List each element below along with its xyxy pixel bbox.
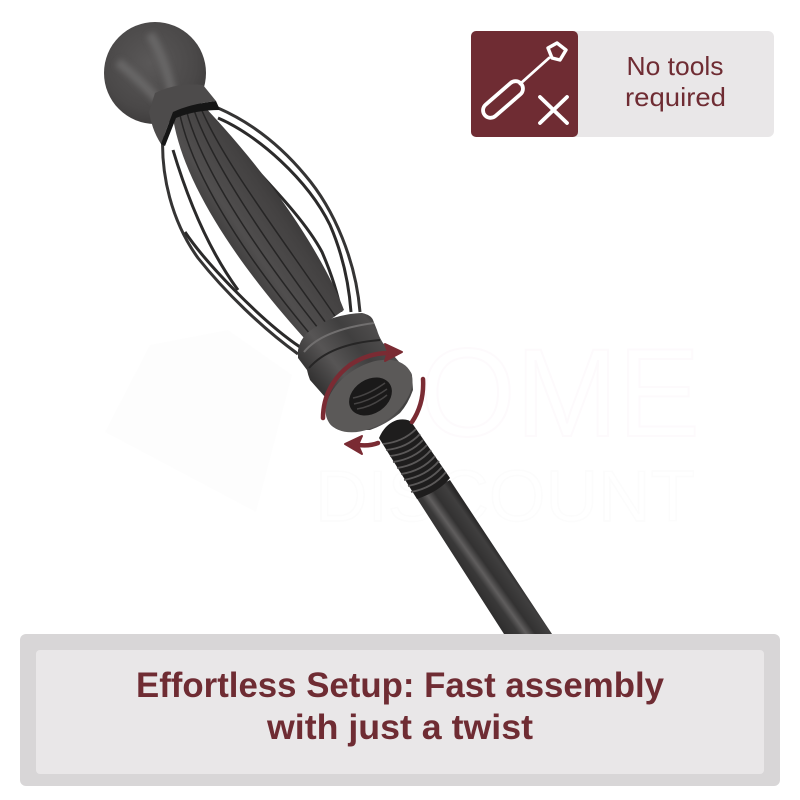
badge background xyxy=(471,31,774,137)
body flutes xyxy=(179,106,335,334)
upper twist arrow xyxy=(323,344,402,418)
lower twist arrow xyxy=(345,379,423,454)
icon: screwdriver crossed xyxy=(480,43,567,123)
panel inner xyxy=(36,650,764,774)
headline: with just a twist xyxy=(266,708,533,747)
collar xyxy=(149,84,216,144)
watermark: home discount logo: DISCOUNT xyxy=(315,457,695,537)
ferrule xyxy=(298,313,413,430)
rod shaft xyxy=(416,480,552,634)
badge: no tools required xyxy=(471,31,774,137)
headline xyxy=(136,666,665,747)
fluted body xyxy=(172,102,344,338)
panel outer xyxy=(20,634,780,786)
cage wires, front xyxy=(163,108,360,354)
badge text: required xyxy=(625,82,726,112)
product: threaded rod xyxy=(379,419,552,634)
icon: twist arrows xyxy=(323,344,423,454)
watermark: home discount logo: OME xyxy=(420,324,700,463)
headline: Effortless Setup: Fast assembly xyxy=(136,666,665,705)
badge text: No tools xyxy=(626,51,724,81)
watermark: home discount logo xyxy=(105,324,700,537)
ferrule face xyxy=(312,345,426,447)
threaded end xyxy=(379,419,450,499)
product: finial xyxy=(104,22,426,447)
cage wires, back xyxy=(173,118,351,347)
finial ball xyxy=(104,22,206,124)
icon tile xyxy=(471,31,578,137)
threaded hole xyxy=(342,370,399,423)
caption panel xyxy=(20,634,780,786)
badge text xyxy=(625,51,726,112)
